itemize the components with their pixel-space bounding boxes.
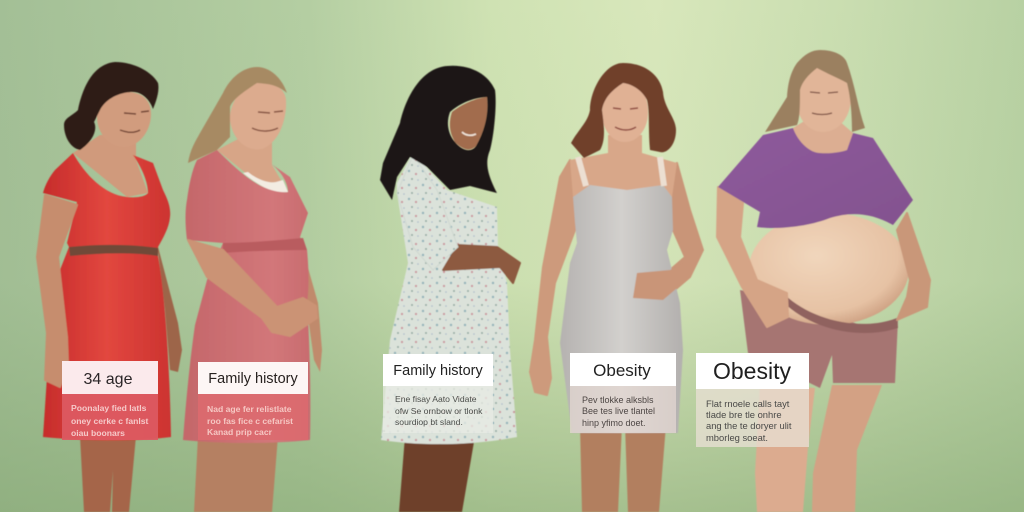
label card: family history floral <box>383 354 493 433</box>
label body text: family history pink <box>207 404 293 437</box>
label body text: obesity grey: hinp yfimo doet. <box>582 418 646 428</box>
label card: obesity grey <box>570 353 676 433</box>
figure 4: woman in grey dress <box>530 63 703 512</box>
label body text: obesity purple <box>706 398 792 443</box>
figure 5: larger woman in purple top <box>717 50 930 512</box>
label body text: family history floral: sourdiop bt sland. <box>395 417 463 427</box>
label body text: family history floral: ofw Se ornbow or tlonk <box>395 406 483 416</box>
label heading: family history floral: Family history <box>393 363 483 379</box>
label body text: obesity purple: mborleg soeat. <box>706 432 768 443</box>
figure 3: woman in floral dress <box>380 66 520 512</box>
label body text: obesity purple: ang the te doryer ulit <box>706 420 792 431</box>
label body text: obesity grey: Pev tlokke alksbls <box>582 395 654 405</box>
label body text: 34 age <box>71 403 149 438</box>
label body text: obesity grey: Bee tes live tlantel <box>582 406 655 416</box>
label body text: family history pink: Kanad prip cacr <box>207 427 273 437</box>
label body text: 34 age: oney cerke c fanlst <box>71 416 149 426</box>
label heading: 34 age: 34 age <box>84 371 133 388</box>
label body text: family history pink: roo fas fice c cefarist <box>207 416 293 426</box>
label heading: obesity purple: Obesity <box>713 358 791 384</box>
label body text: obesity purple: tlade bre tle onhre <box>706 409 782 420</box>
label body text: family history floral: Ene fisay Aato Vidate <box>395 394 477 404</box>
label card: 34 age <box>62 361 158 440</box>
label body text: 34 age: oiau boonars <box>71 428 125 438</box>
label card: family history pink <box>198 362 308 440</box>
label body text: family history floral <box>395 394 483 427</box>
label heading: obesity grey: Obesity <box>593 361 651 380</box>
label body text: 34 age: Poonalay fied latls <box>71 403 147 413</box>
label body text: obesity purple: Flat rnoele calls tayt <box>706 398 790 409</box>
label body text: obesity grey <box>582 395 655 428</box>
label card: obesity purple <box>696 353 809 447</box>
label body text: family history pink: Nad age fer relistlate <box>207 404 292 414</box>
figure 2: woman in pink dress <box>183 67 322 512</box>
label heading: family history pink: Family history <box>208 371 298 387</box>
figure 1: woman in red dress <box>37 62 182 512</box>
